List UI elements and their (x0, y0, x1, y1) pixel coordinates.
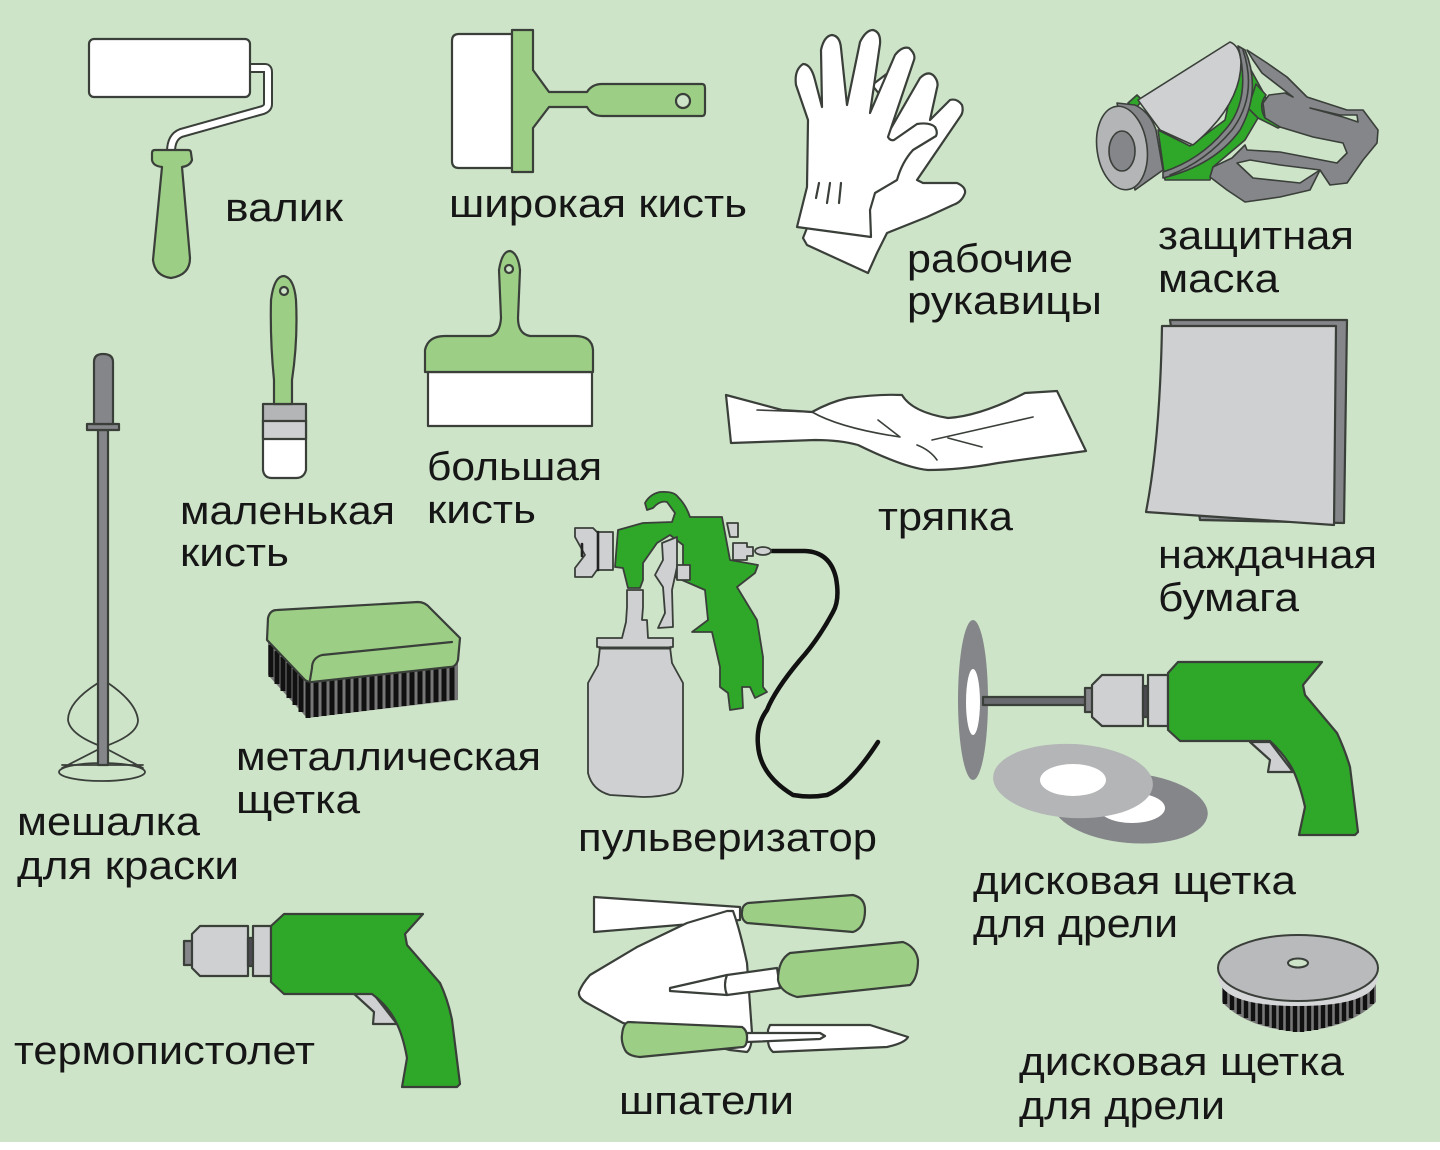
icon: sandpaper (1146, 320, 1347, 525)
label: metal brush: металлическая (236, 735, 541, 779)
icon: paint roller (89, 39, 268, 278)
icon: large brush (425, 251, 593, 426)
label: paint mixer: мешалка (17, 800, 200, 844)
icon: metal brush (267, 602, 460, 718)
icon: paint mixer (59, 354, 145, 781)
icon: small brush (263, 276, 306, 478)
label: sandpaper line 2: бумага (1158, 576, 1299, 620)
icon: spatulas (579, 895, 918, 1057)
icon: heat gun (184, 914, 460, 1087)
icon: spray gun (575, 492, 878, 797)
label: work gloves: рабочие (907, 237, 1073, 281)
label: work gloves line 2: рукавицы (907, 279, 1102, 323)
icon: disc brush (1218, 935, 1378, 1032)
label: small brush: маленькая (180, 489, 395, 533)
label: disc brush line 2: для дрели (1019, 1084, 1225, 1128)
label: metal brush line 2: щетка (236, 778, 360, 822)
label: large brush: большая (427, 445, 602, 489)
label: protective mask line 2: маска (1158, 257, 1279, 301)
label: spatulas: шпатели (619, 1079, 794, 1123)
icon: rag (726, 391, 1086, 470)
icon: protective mask (1091, 42, 1378, 202)
label: protective mask: защитная (1158, 214, 1354, 258)
label: disc brush: дисковая щетка (1019, 1040, 1344, 1084)
icon: wide brush (452, 30, 705, 172)
label: small brush line 2: кисть (180, 531, 289, 575)
label: large brush line 2: кисть (427, 488, 536, 532)
label: rag: тряпка (878, 495, 1013, 539)
label: paint mixer line 2: для краски (17, 844, 239, 888)
label: heat gun: термопистолет (14, 1029, 315, 1073)
label: sandpaper: наждачная (1158, 533, 1377, 577)
label: drill disc brush: дисковая щетка (973, 859, 1296, 903)
label: spray gun: пульверизатор (578, 816, 877, 860)
label: roller: валик (225, 186, 344, 230)
icon: gloves (796, 30, 965, 273)
label: drill disc brush line 2: для дрели (973, 902, 1178, 946)
icon: drill with disc brush (958, 620, 1358, 850)
label: wide brush: широкая кисть (449, 182, 747, 226)
